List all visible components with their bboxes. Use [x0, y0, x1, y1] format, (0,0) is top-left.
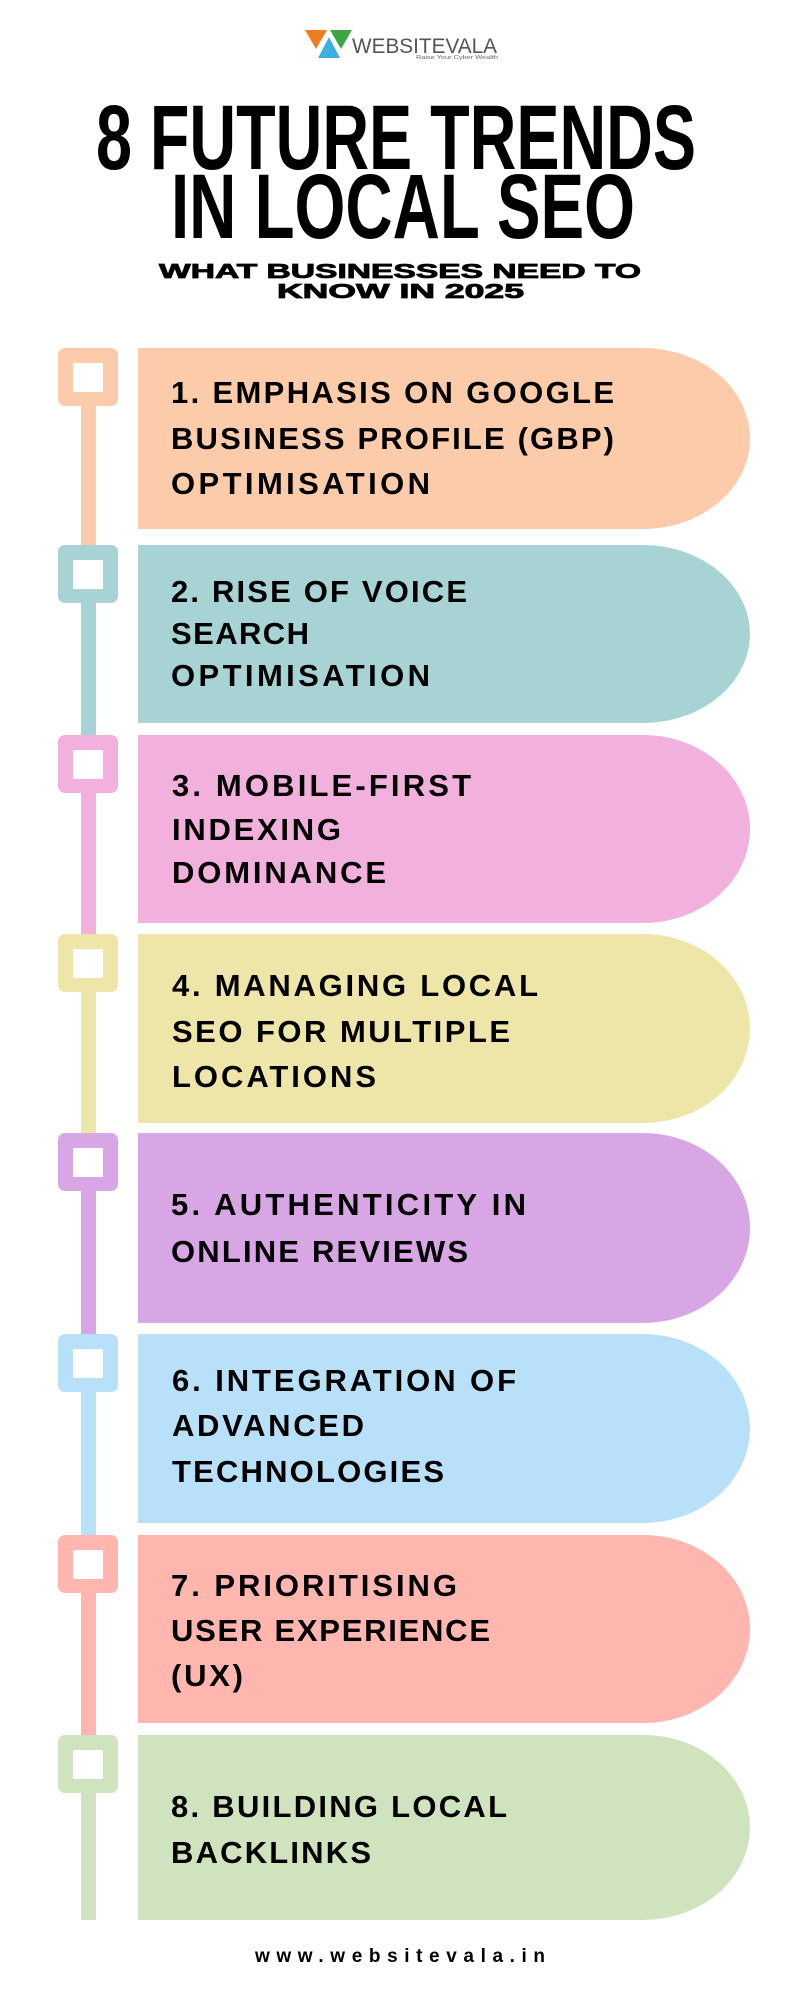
panel 2: SEARCH: [171, 616, 309, 651]
panel 8: BACKLINKS: [171, 1835, 371, 1870]
panel 6: [58, 1334, 750, 1523]
panel 4: SEO FOR MULTIPLE: [172, 1014, 510, 1049]
panel 6: 6. INTEGRATION OF: [172, 1363, 516, 1398]
panel 5: ONLINE REVIEWS: [171, 1234, 468, 1269]
title: [96, 87, 696, 258]
panel 1: 1. EMPHASIS ON GOOGLE: [171, 375, 614, 410]
subtitle: KNOW IN 2025: [277, 281, 524, 303]
panel 3: INDEXING: [172, 812, 341, 847]
panel 2: [58, 545, 750, 723]
timeline line: [81, 406, 96, 1920]
footer url: www.websitevala.in: [254, 1946, 545, 1967]
panel 7: USER EXPERIENCE: [171, 1613, 490, 1648]
panel 8: 8. BUILDING LOCAL: [171, 1789, 507, 1824]
panel 4: 4. MANAGING LOCAL: [172, 968, 538, 1003]
panel 7: (UX): [171, 1658, 243, 1693]
panel 1: BUSINESS PROFILE (GBP): [171, 421, 614, 456]
panel 3: [58, 735, 750, 923]
panel 1: OPTIMISATION: [171, 466, 430, 501]
panel 8: [58, 1735, 750, 1920]
panel 3: 3. MOBILE-FIRST: [172, 768, 471, 803]
panel 2: 2. RISE OF VOICE: [171, 574, 467, 609]
logo: WEBSITEVALA: [352, 35, 497, 58]
logo: Raise Your Cyber Wealth: [416, 55, 498, 61]
panel 3: DOMINANCE: [172, 855, 386, 890]
subtitle: WHAT BUSINESSES NEED TO: [159, 261, 641, 283]
subtitle: [159, 261, 641, 303]
panel 6: ADVANCED: [172, 1408, 364, 1443]
panel 4: LOCATIONS: [172, 1059, 376, 1094]
panel 6: TECHNOLOGIES: [172, 1454, 444, 1489]
panel 1: [58, 348, 750, 529]
panel 2: OPTIMISATION: [171, 658, 430, 693]
panel 4: [58, 934, 750, 1123]
panel 5: [58, 1133, 750, 1323]
panel 5: 5. AUTHENTICITY IN: [171, 1187, 526, 1222]
panel 7: [58, 1535, 750, 1723]
logo: [305, 30, 498, 61]
panel 7: 7. PRIORITISING: [171, 1568, 457, 1603]
